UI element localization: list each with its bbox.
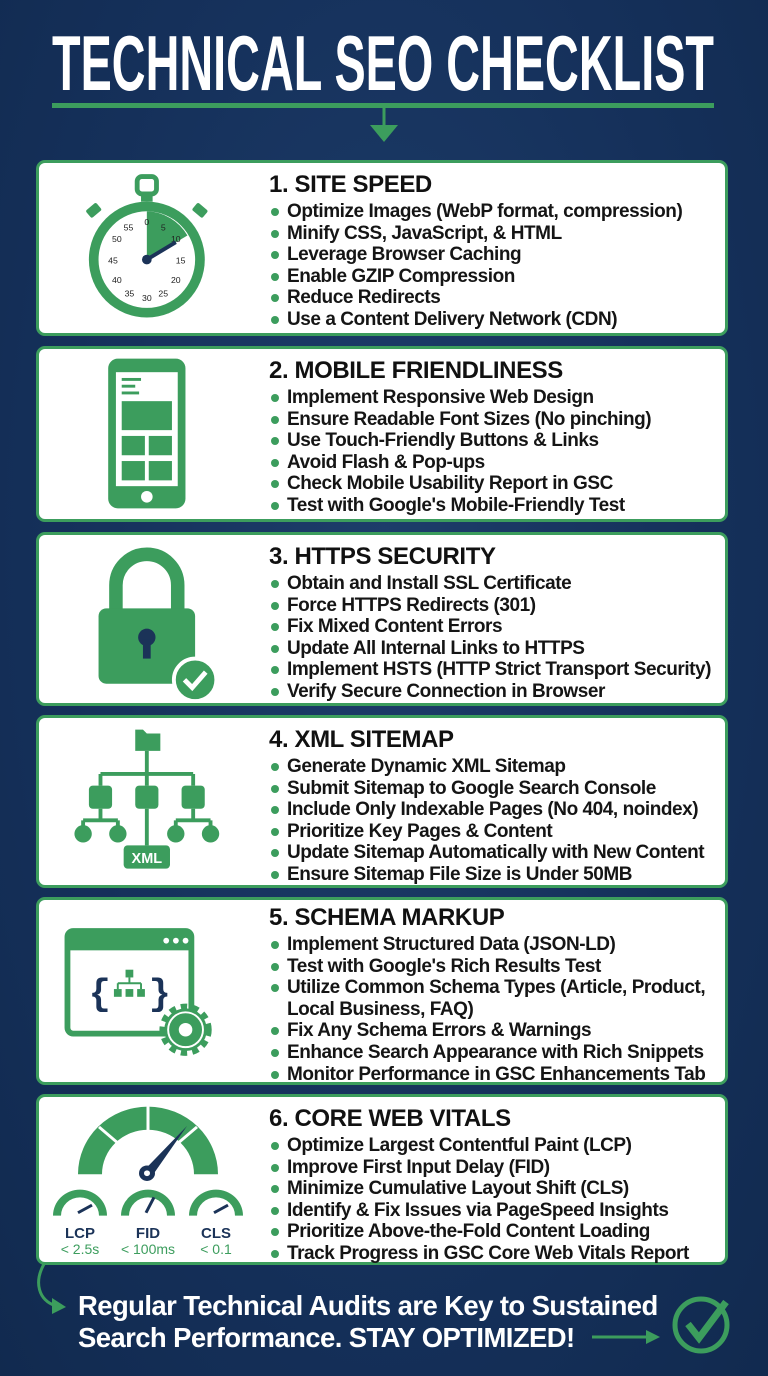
icon: stopwatch: 10 [171, 234, 181, 244]
text: site speed: Leverage Browser Caching [287, 244, 521, 265]
icon: sitemap tree: XML [132, 851, 162, 867]
icon: stopwatch: 20 [171, 275, 181, 285]
text: cwv: Minimize Cumulative Layout Shift (CLS) [287, 1178, 629, 1199]
icon: stopwatch: 40 [112, 275, 122, 285]
footer text: Regular Technical Audits are Key to Sustained [78, 1290, 658, 1321]
panel: site speed [36, 160, 728, 336]
panel: xml sitemap [36, 715, 728, 888]
icon: sitemap tree [74, 730, 220, 869]
text: site speed: Optimize Images (WebP format, compression) [287, 201, 682, 222]
footer text: Search Performance. STAY OPTIMIZED! [78, 1322, 575, 1353]
gauge thresholds: < 2.5s [61, 1241, 99, 1257]
panel: core web vitals [36, 1094, 728, 1265]
text: sitemap: Prioritize Key Pages & Content [287, 821, 552, 842]
text: site speed [269, 171, 682, 330]
text: https: Obtain and Install SSL Certificate [287, 573, 571, 594]
text: schema: 5. SCHEMA MARKUP [269, 904, 504, 931]
icon: stopwatch: 55 [124, 223, 133, 233]
text: https: 3. HTTPS SECURITY [269, 543, 496, 570]
text: site speed: 1. SITE SPEED [269, 171, 432, 198]
text: cwv: Optimize Largest Contentful Paint (LCP) [287, 1135, 632, 1156]
text: schema: Monitor Performance in GSC Enhancements Tab [287, 1064, 705, 1085]
icon: stopwatch: 0 [144, 217, 149, 227]
text: mobile: Use Touch-Friendly Buttons & Links [287, 430, 599, 451]
text: schema: Utilize Common Schema Types (Article, Product, [287, 977, 705, 998]
gauge thresholds [61, 1241, 232, 1257]
text: mobile: Check Mobile Usability Report in GSC [287, 473, 613, 494]
text: mobile [269, 357, 651, 516]
text: cwv: Identify & Fix Issues via PageSpeed Insights [287, 1200, 668, 1221]
footer text [78, 1290, 658, 1353]
text: cwv [269, 1105, 690, 1264]
icon: schema browser: } [149, 975, 171, 1017]
text: mobile: Avoid Flash & Pop-ups [287, 452, 485, 473]
text: site speed: Use a Content Delivery Network (CDN) [287, 309, 617, 330]
text: mobile: Implement Responsive Web Design [287, 387, 594, 408]
icon: padlock [98, 548, 214, 700]
icon: stopwatch: 15 [176, 255, 186, 265]
text: schema: Implement Structured Data (JSON-LD) [287, 934, 615, 955]
text: sitemap: 4. XML SITEMAP [269, 726, 454, 753]
text: schema: Local Business, FAQ) [287, 999, 473, 1020]
text: https: Force HTTPS Redirects (301) [287, 595, 536, 616]
panel: https security [36, 532, 728, 706]
panel: mobile friendliness [36, 346, 728, 522]
icon: stopwatch: 45 [108, 255, 118, 265]
text: sitemap: Include Only Indexable Pages (No 404, noindex) [287, 799, 698, 820]
icon: stopwatch: 5 [161, 223, 166, 233]
gauge thresholds: < 100ms [121, 1241, 175, 1257]
text: https: Fix Mixed Content Errors [287, 616, 502, 637]
text: https: Update All Internal Links to HTTPS [287, 638, 585, 659]
text: https: Verify Secure Connection in Browser [287, 681, 605, 702]
icon: stopwatch: 25 [158, 288, 168, 298]
text: cwv: Improve First Input Delay (FID) [287, 1157, 550, 1178]
icon: stopwatch: 35 [125, 288, 134, 298]
text: sitemap: Update Sitemap Automatically with New Content [287, 842, 704, 863]
text: schema: Enhance Search Appearance with Rich Snippets [287, 1042, 704, 1063]
icon: stopwatch: 50 [112, 234, 122, 244]
text: schema: Fix Any Schema Errors & Warnings [287, 1020, 591, 1041]
text: site speed: Enable GZIP Compression [287, 266, 515, 287]
icon: gauges [53, 1106, 243, 1242]
text: schema [269, 904, 706, 1085]
text: mobile: 2. MOBILE FRIENDLINESS [269, 357, 563, 384]
text: sitemap: Ensure Sitemap File Size is Under 50MB [287, 864, 632, 885]
gauge thresholds: < 0.1 [200, 1241, 232, 1257]
icon: check circle [672, 1296, 730, 1354]
icon: schema browser [64, 928, 212, 1056]
text: cwv: Track Progress in GSC Core Web Vitals Report [287, 1243, 689, 1264]
panel: schema markup [36, 897, 728, 1085]
icon: schema browser: { [89, 975, 111, 1017]
text: cwv: 6. CORE WEB VITALS [269, 1105, 511, 1132]
icon: phone [108, 358, 186, 508]
icon: gauges: LCP [65, 1226, 95, 1242]
text: site speed: Reduce Redirects [287, 287, 440, 308]
icon: gauges: CLS [201, 1226, 231, 1242]
text: mobile: Ensure Readable Font Sizes (No pinching) [287, 409, 651, 430]
text: schema: Test with Google's Rich Results Test [287, 956, 601, 977]
text: https [269, 543, 711, 702]
text: site speed: Minify CSS, JavaScript, & HTML [287, 223, 562, 244]
icon: stopwatch [86, 174, 208, 318]
text: mobile: Test with Google's Mobile-Friendly Test [287, 495, 625, 516]
text: cwv: Prioritize Above-the-Fold Content Loading [287, 1221, 650, 1242]
footer arrow right [592, 1330, 660, 1344]
text: https: Implement HSTS (HTTP Strict Transport Security) [287, 659, 711, 680]
text: sitemap: Generate Dynamic XML Sitemap [287, 756, 566, 777]
footer arrow [37, 1264, 66, 1314]
text: sitemap: Submit Sitemap to Google Search Console [287, 778, 656, 799]
icon: gauges: FID [136, 1226, 160, 1242]
icon: stopwatch: 30 [142, 293, 152, 303]
text: sitemap [269, 726, 704, 885]
title [52, 19, 714, 142]
